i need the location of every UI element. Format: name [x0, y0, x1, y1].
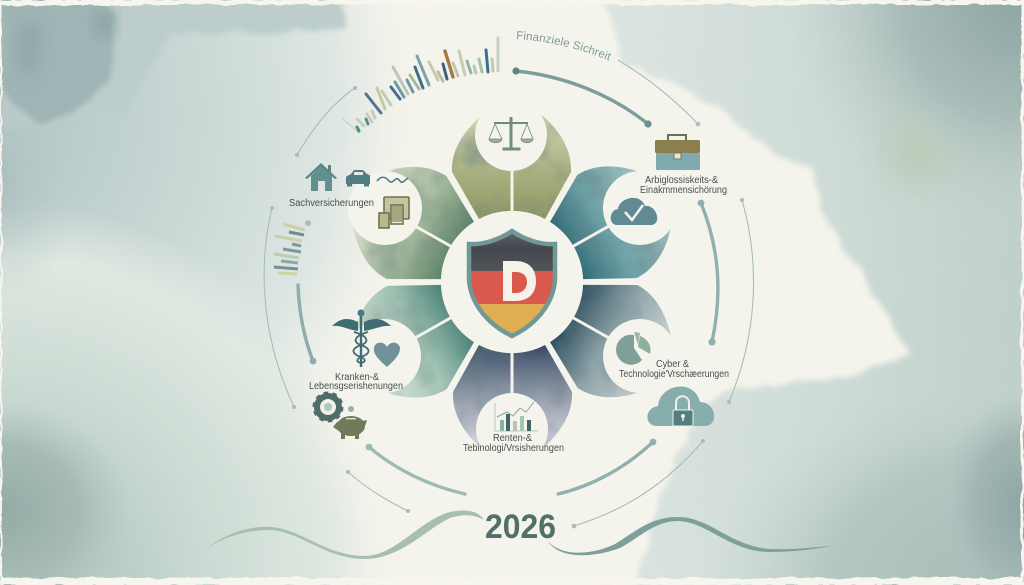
label: Sachversicherungen: Sachversicherungen: [289, 198, 374, 209]
icon: heart: [374, 343, 400, 367]
label: Cyber und Technologie: [619, 359, 729, 380]
icon: gear: [314, 393, 342, 421]
heading: Finanzielle Sicherheit: Finanziele Sichreit: [516, 31, 612, 60]
thick arc: top right: [512, 67, 652, 128]
thick arc: right: [698, 200, 718, 346]
petal: top olive: [452, 116, 571, 219]
label: Kranken und Leben: Kranken-&: [335, 372, 379, 383]
petal: upper right teal: [537, 147, 685, 302]
label: Arbeitslosigkeit: [640, 175, 727, 196]
icon: car: [346, 170, 370, 186]
icon: pie chart: [616, 332, 651, 365]
flower diagram: [338, 99, 686, 465]
thick arc: left: [298, 285, 316, 364]
icon: scales: [489, 117, 533, 150]
petal: lower left green: [339, 262, 487, 417]
icon: piggy bank: [333, 406, 367, 439]
arc: bottom right: [572, 439, 705, 528]
watercolor wash: right: [604, 0, 1024, 585]
icon: house: [305, 163, 337, 191]
swoosh: right: [548, 517, 832, 555]
watercolor wash: left: [0, 0, 520, 585]
icon: chart with growth line: [495, 402, 538, 431]
arc: top right: [618, 60, 700, 126]
label: Renten: [463, 433, 564, 454]
icon: caduceus: [332, 310, 391, 367]
center circle: [441, 211, 583, 353]
arc: bottom left: [346, 470, 410, 513]
label: Kranken und Leben: Lebensgserishenungen: [309, 381, 403, 392]
arc: top left: [295, 86, 357, 157]
icon: briefcase: [655, 135, 700, 170]
arc: left: [264, 206, 296, 409]
petals: [338, 116, 686, 448]
thick arc: bottom right: [558, 439, 656, 494]
icon: cloud with check: [611, 198, 657, 225]
icon: documents: [379, 197, 409, 228]
bar chart along arc: [342, 38, 498, 133]
label: Arbeitslosigkeit: Einakmmensichörung: [640, 185, 727, 196]
label: Cyber und Technologie: Cyber &: [656, 359, 689, 370]
label: Renten: Tebinologi/Vrsisherungen: [463, 443, 564, 454]
small horizontal bar chart left: [274, 220, 311, 274]
petal: upper left green: [338, 148, 487, 303]
ring of thin arcs: [264, 60, 754, 528]
arc: right: [727, 198, 754, 404]
icon: cloud with lock: [647, 387, 714, 426]
label: Kranken und Leben: [309, 372, 403, 392]
label: Renten: Renten-&: [493, 433, 532, 444]
year: 2026: 2026: [485, 508, 556, 546]
ring of thick arcs: [298, 67, 718, 494]
icon: German shield: [466, 228, 558, 338]
petal: bottom indigo: [453, 345, 572, 448]
label: Arbeitslosigkeit: Arbiglossiskeits-&: [645, 175, 718, 186]
petal: lower right slate: [537, 261, 686, 416]
thick arc: bottom left: [366, 444, 465, 494]
label: Cyber und Technologie: Technologie'Vrschæerungen: [619, 369, 729, 380]
icon: wave: [377, 177, 408, 182]
swoosh: left: [207, 511, 484, 559]
